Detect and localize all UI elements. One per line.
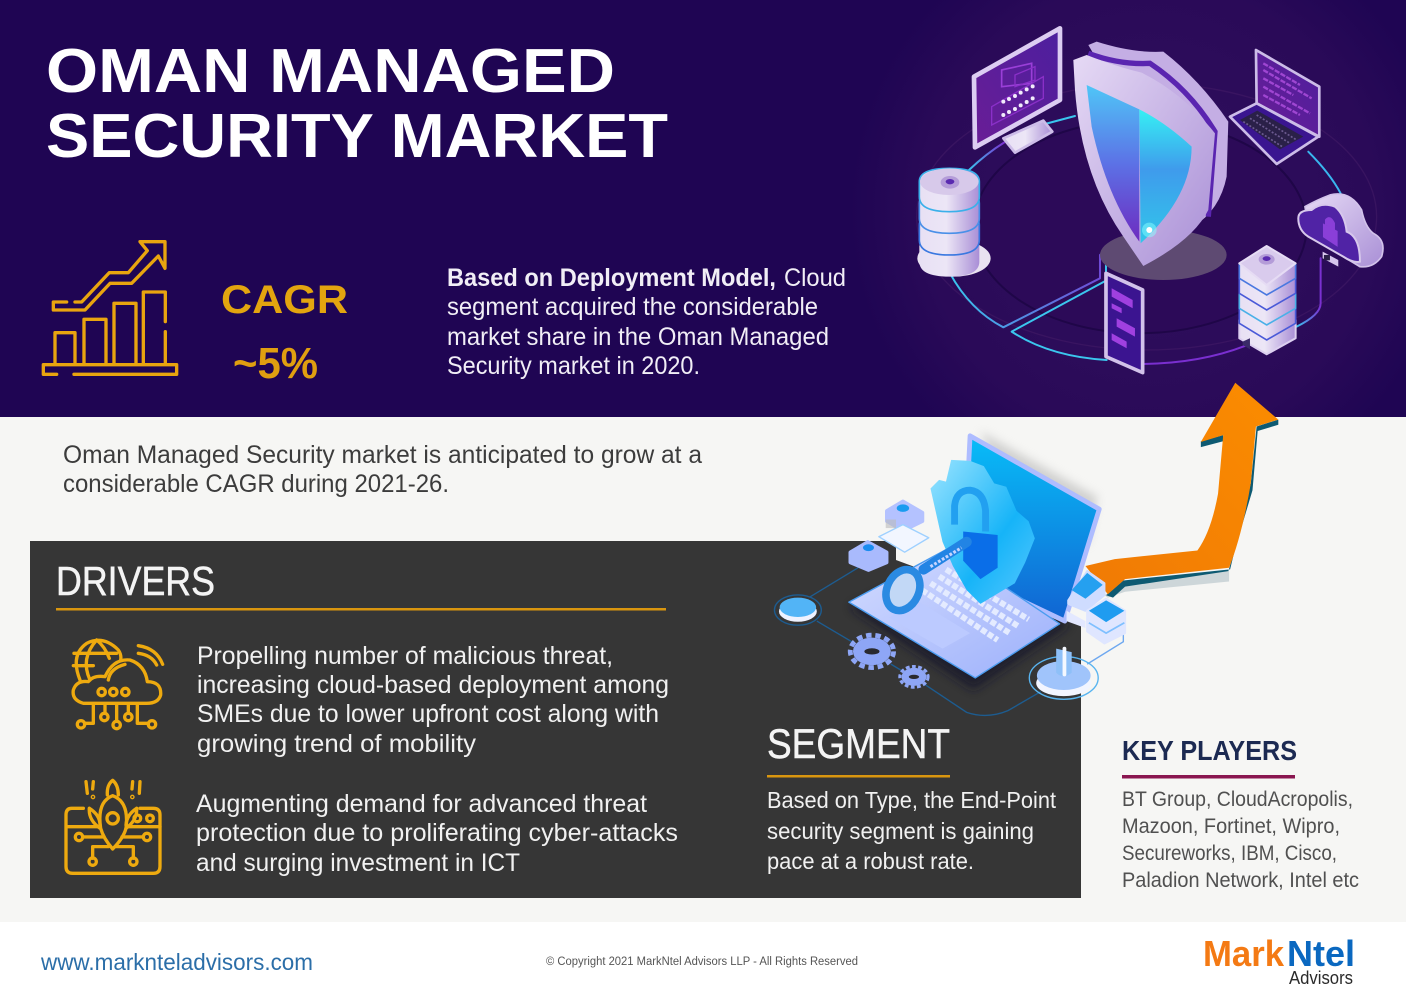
phone bbox=[1106, 273, 1143, 373]
drivers text: growing trend of mobility bbox=[197, 730, 477, 758]
key players list: Paladion Network, Intel etc bbox=[1122, 869, 1359, 892]
logo: Advisors bbox=[1289, 968, 1353, 988]
deployment model text: Security market in 2020. bbox=[447, 352, 700, 380]
title bbox=[46, 37, 668, 171]
segment text bbox=[767, 787, 1057, 874]
key bbox=[880, 542, 967, 616]
lock shield bbox=[930, 460, 1035, 604]
key players list bbox=[1122, 788, 1359, 892]
key players heading: KEY PLAYERS bbox=[1122, 735, 1297, 766]
title: SECURITY MARKET bbox=[46, 102, 668, 171]
intro text: considerable CAGR during 2021-26. bbox=[63, 470, 449, 498]
side chips right bbox=[1067, 571, 1125, 643]
key players list: BT Group, CloudAcropolis, bbox=[1122, 788, 1353, 811]
power button bbox=[1029, 649, 1098, 699]
logo bbox=[1203, 933, 1355, 988]
shield bbox=[1073, 42, 1228, 266]
deployment model text: market share in the Oman Managed bbox=[447, 323, 829, 351]
CAGR label: CAGR bbox=[221, 278, 348, 322]
drivers text: Propelling number of malicious threat, bbox=[197, 642, 613, 670]
website link: www.marknteladvisors.com bbox=[40, 949, 313, 975]
screen bbox=[963, 436, 1099, 621]
drivers text: SMEs due to lower upfront cost along with bbox=[197, 700, 659, 728]
gears bbox=[850, 635, 928, 687]
cloud lock bbox=[1298, 194, 1383, 267]
floating chips bbox=[850, 501, 929, 570]
key players underline bbox=[1122, 775, 1295, 778]
illustration: shield network bbox=[917, 28, 1383, 373]
laptop bbox=[1230, 50, 1319, 164]
segment text: Based on Type, the End-Point bbox=[767, 787, 1057, 813]
segment underline bbox=[767, 775, 950, 778]
light content band bbox=[0, 417, 1406, 922]
logo: Mark bbox=[1203, 933, 1285, 974]
intro text: Oman Managed Security market is anticipated to grow at a bbox=[63, 441, 702, 469]
monitor bbox=[974, 28, 1060, 153]
header panel bbox=[0, 0, 1406, 417]
segment heading: SEGMENT bbox=[767, 720, 950, 767]
copyright: © Copyright 2021 MarkNtel Advisors LLP - All Rights Reserved bbox=[546, 956, 858, 968]
icon: growth chart bbox=[43, 242, 177, 374]
segment text: pace at a robust rate. bbox=[767, 848, 974, 874]
drivers text bbox=[196, 642, 678, 877]
deployment model text: Cloud bbox=[784, 264, 846, 292]
dark panel: drivers and segment bbox=[30, 541, 1081, 898]
shield stand bbox=[1100, 230, 1227, 280]
server rack bbox=[1239, 246, 1296, 354]
laptop base bbox=[849, 549, 1060, 678]
deployment model text: Based on Deployment Model, bbox=[447, 264, 776, 292]
segment text: security segment is gaining bbox=[767, 818, 1034, 844]
icon: cloud globe network bbox=[73, 640, 163, 729]
deployment model text: segment acquired the considerable bbox=[447, 293, 818, 321]
database bbox=[917, 168, 991, 277]
illustration: laptop with key and lock bbox=[774, 432, 1125, 715]
icon: rocket browser bbox=[66, 780, 160, 873]
drivers text: increasing cloud-based deployment among bbox=[197, 671, 669, 699]
intro text bbox=[63, 441, 702, 498]
logo: Ntel bbox=[1287, 933, 1355, 974]
drivers text: and surging investment in ICT bbox=[196, 849, 520, 877]
arrow bbox=[1085, 383, 1278, 598]
round button bbox=[774, 595, 821, 625]
deployment model text bbox=[447, 264, 846, 380]
drivers underline bbox=[56, 608, 666, 610]
key players list: Secureworks, IBM, Cisco, bbox=[1122, 842, 1337, 865]
drivers text: protection due to proliferating cyber-attacks bbox=[196, 819, 678, 847]
drivers text: Augmenting demand for advanced threat bbox=[196, 790, 647, 818]
title: OMAN MANAGED bbox=[46, 37, 615, 106]
key players list: Mazoon, Fortinet, Wipro, bbox=[1122, 815, 1340, 838]
drivers heading: DRIVERS bbox=[56, 558, 215, 604]
CAGR value: ~5% bbox=[233, 339, 318, 388]
